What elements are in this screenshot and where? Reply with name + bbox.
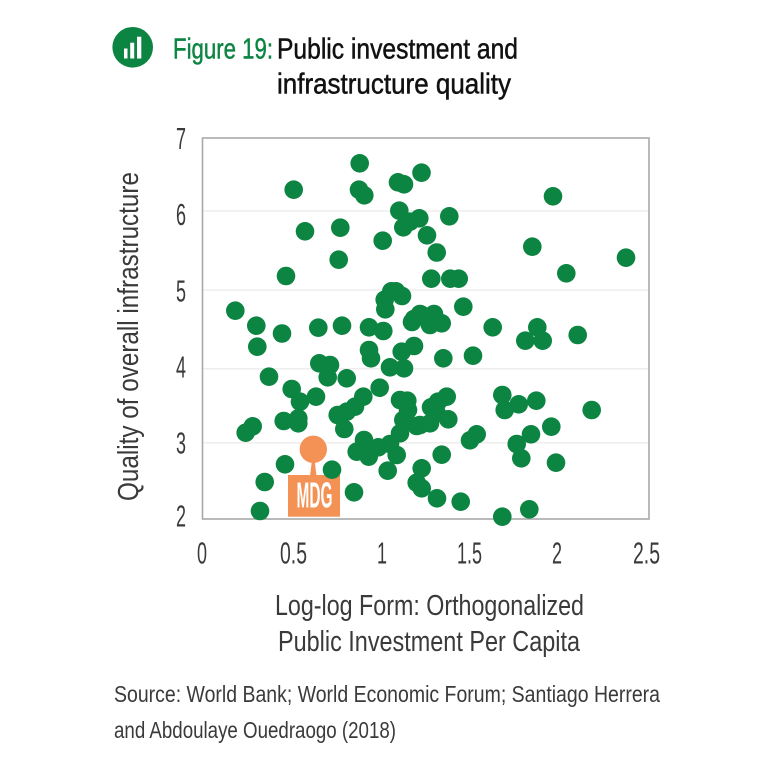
x-axis title bbox=[275, 590, 584, 658]
x-axis labels: 2.5 bbox=[633, 535, 660, 570]
x-axis labels: 0.5 bbox=[280, 535, 307, 570]
x-axis labels: 2 bbox=[552, 535, 562, 570]
x-axis labels: 1.5 bbox=[457, 535, 482, 570]
x-axis title: Log-log Form: Orthogonalized bbox=[275, 590, 584, 622]
icon: bar chart badge bbox=[112, 27, 153, 68]
source note bbox=[114, 681, 660, 743]
y-axis labels: 7 bbox=[176, 121, 186, 156]
x-axis labels bbox=[197, 535, 660, 570]
y-axis labels bbox=[176, 121, 186, 534]
y-axis labels: 4 bbox=[176, 350, 186, 384]
y-axis labels: 6 bbox=[176, 197, 186, 232]
callout: MDG marker bbox=[288, 436, 340, 517]
x-axis title: Public Investment Per Capita bbox=[278, 626, 581, 658]
source note: Source: World Bank; World Economic Forum; Santiago Herrera bbox=[114, 681, 660, 707]
x-axis labels: 1 bbox=[377, 535, 387, 570]
y-axis title: Quality of overall infrastructure bbox=[113, 172, 145, 501]
x-axis labels: 0 bbox=[197, 535, 207, 570]
y-axis labels: 2 bbox=[176, 498, 186, 534]
y-axis labels: 5 bbox=[176, 274, 186, 308]
country dots bbox=[226, 154, 635, 526]
title: infrastructure quality bbox=[277, 68, 511, 100]
scatter plot bbox=[202, 138, 649, 526]
dot overlapping MDG label bbox=[323, 460, 341, 479]
title: Figure 19: bbox=[173, 34, 273, 66]
callout: MDG marker: MDG bbox=[296, 474, 332, 515]
title bbox=[173, 34, 518, 100]
y-axis labels: 3 bbox=[176, 426, 186, 460]
source note: and Abdoulaye Ouedraogo (2018) bbox=[114, 717, 396, 743]
title: Public investment and bbox=[277, 34, 518, 66]
